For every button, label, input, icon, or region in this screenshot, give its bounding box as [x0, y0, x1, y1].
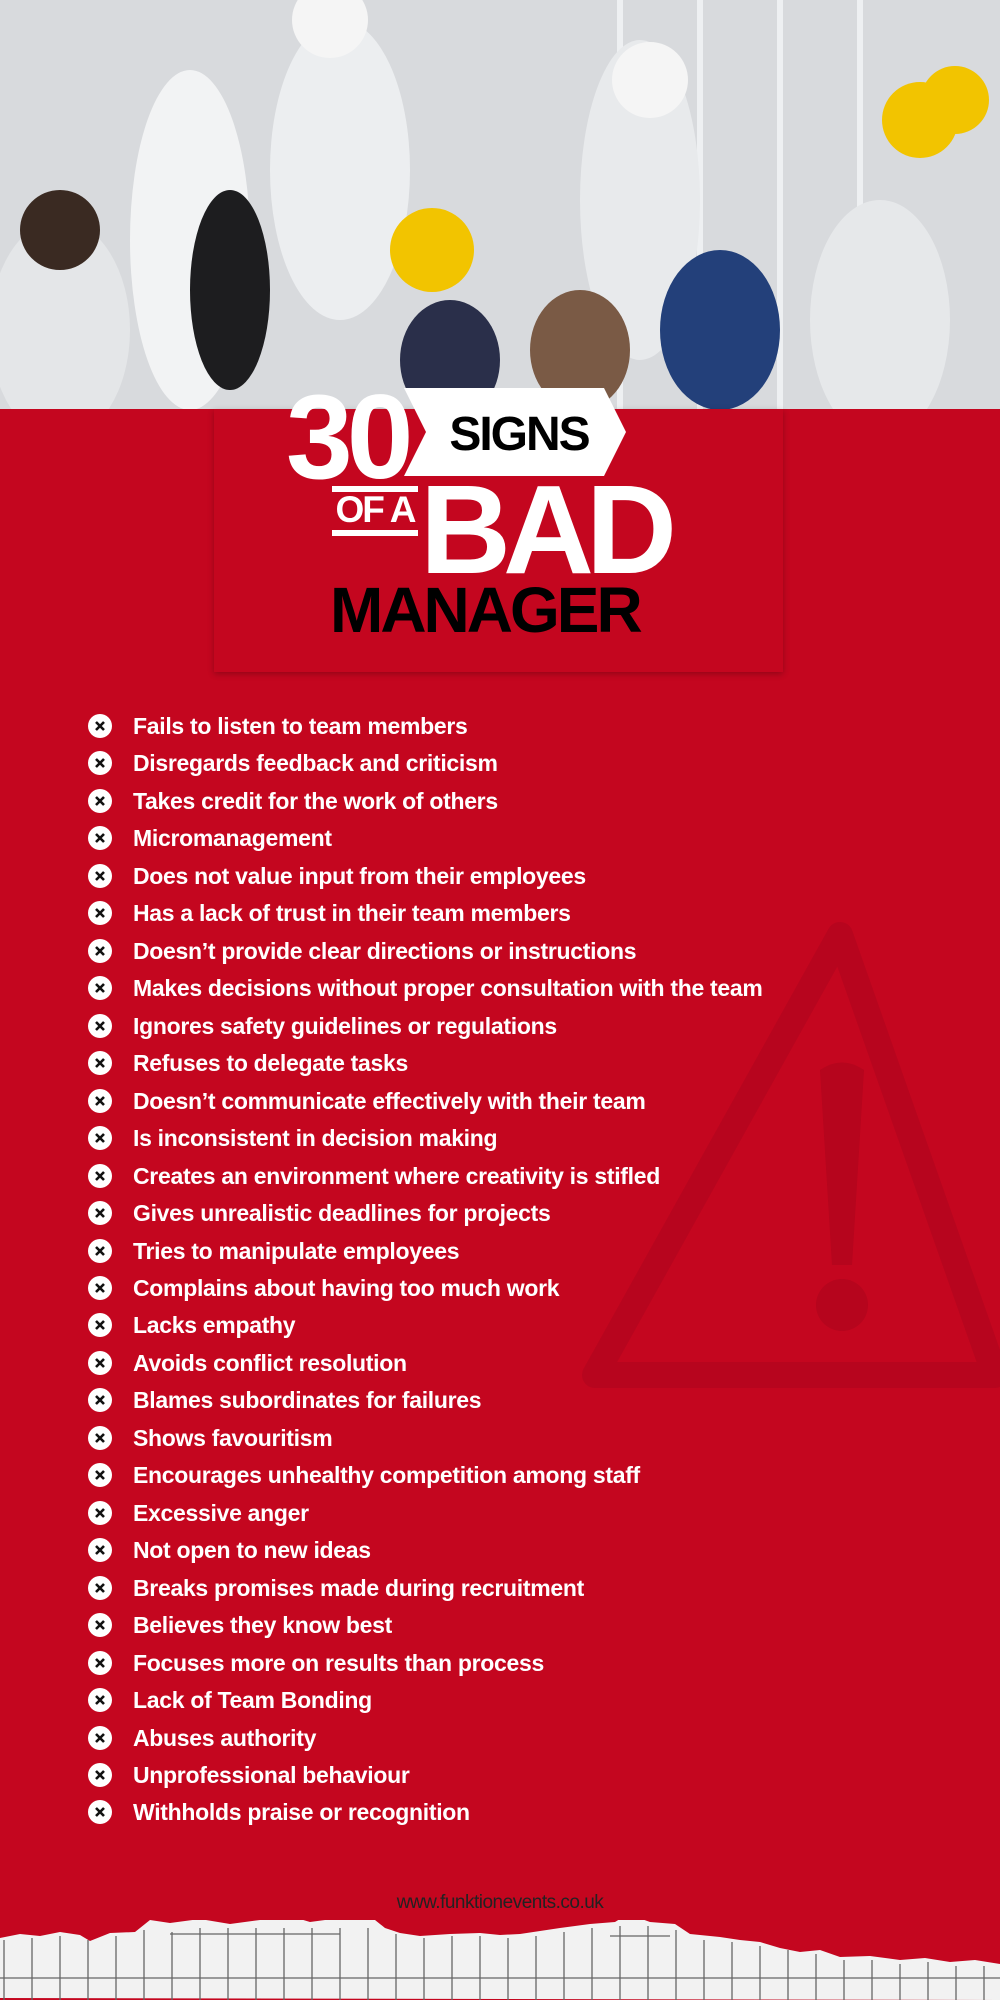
list of signs: Encourages unhealthy competition among staff — [133, 1462, 640, 1488]
OF A: OF A — [335, 489, 414, 530]
list of signs: Avoids conflict resolution — [133, 1350, 407, 1376]
list of signs: Doesn’t provide clear directions or instructions — [133, 938, 636, 964]
title box — [214, 409, 783, 672]
list of signs: Does not value input from their employees — [133, 862, 586, 888]
list of signs: Is inconsistent in decision making — [133, 1124, 497, 1150]
list of signs: Lacks empathy — [133, 1312, 295, 1338]
background warning triangle — [582, 922, 1000, 1388]
list of signs: Excessive anger — [133, 1500, 309, 1526]
list of signs: Lack of Team Bonding — [133, 1686, 372, 1712]
list of signs: Tries to manipulate employees — [133, 1238, 459, 1264]
list of signs: Micromanagement — [133, 824, 332, 850]
list of signs: Abuses authority — [133, 1724, 316, 1750]
list of signs: Shows favouritism — [133, 1424, 332, 1450]
list of signs: Disregards feedback and criticism — [133, 750, 498, 776]
list of signs: Fails to listen to team members — [133, 712, 468, 738]
list of signs: Breaks promises made during recruitment — [133, 1574, 584, 1600]
list of signs: Blames subordinates for failures — [133, 1386, 481, 1412]
SIGNS banner: SIGNS — [449, 408, 590, 461]
list of signs: Withholds praise or recognition — [133, 1798, 470, 1824]
list of signs: Unprofessional behaviour — [133, 1762, 410, 1788]
list of signs: Has a lack of trust in their team members — [133, 900, 571, 926]
list of signs: Doesn’t communicate effectively with their team — [133, 1088, 646, 1114]
photo header — [0, 0, 1000, 409]
list of signs: Makes decisions without proper consultation with the team — [133, 974, 763, 1000]
list of signs: Creates an environment where creativity is stifled — [133, 1162, 660, 1188]
list of signs: Gives unrealistic deadlines for projects — [133, 1200, 550, 1226]
SIGNS banner — [404, 388, 626, 476]
torn paper bottom — [0, 1920, 1000, 2000]
list of signs: Not open to new ideas — [133, 1536, 371, 1562]
MANAGER: MANAGER — [330, 574, 640, 646]
list of signs: Ignores safety guidelines or regulations — [133, 1012, 557, 1038]
title — [286, 370, 672, 646]
BAD: BAD — [420, 459, 669, 600]
list of signs: Believes they know best — [133, 1612, 392, 1638]
list of signs: Complains about having too much work — [133, 1274, 559, 1300]
30: 30 — [286, 370, 407, 504]
list of signs: Focuses more on results than process — [133, 1650, 544, 1676]
list of signs — [88, 712, 763, 1825]
list of signs: Takes credit for the work of others — [133, 788, 498, 814]
list of signs: Refuses to delegate tasks — [133, 1050, 408, 1076]
website footer: www.funktionevents.co.uk — [397, 1892, 603, 1913]
